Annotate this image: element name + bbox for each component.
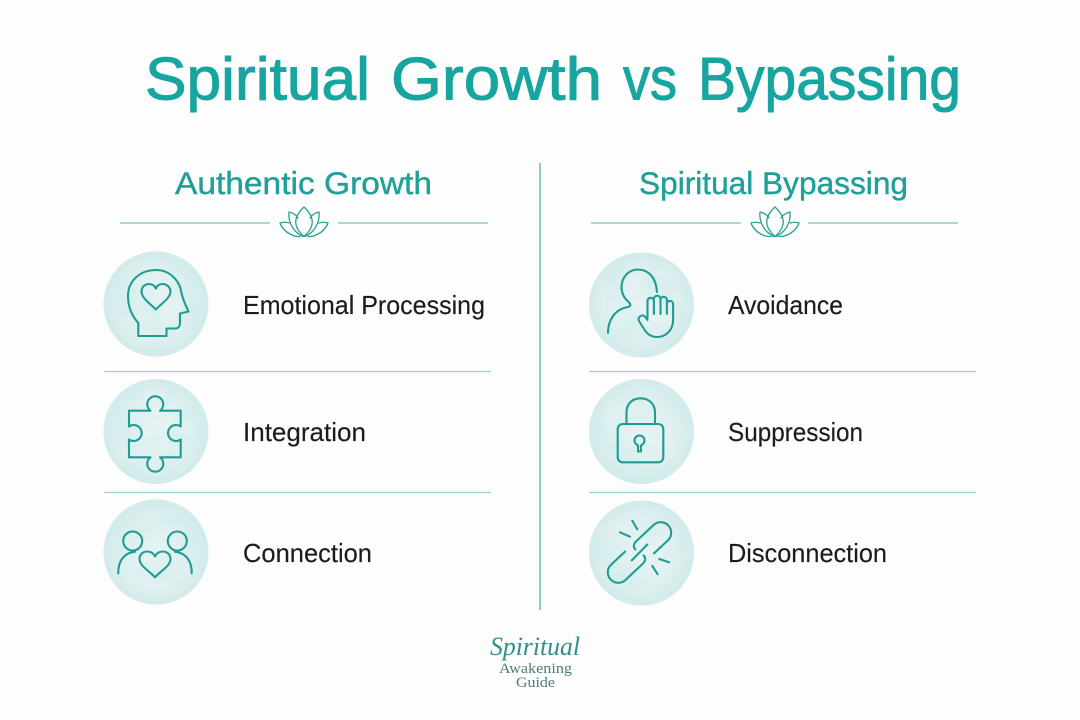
heading: authentic growth: Authentic Growth (175, 165, 432, 201)
heading divider with lotus (120, 207, 488, 237)
label: Connection (243, 538, 372, 568)
title: Bypassing (698, 46, 961, 112)
icon: person with raised hand (589, 252, 694, 358)
label: Integration (243, 417, 366, 447)
label: Emotional Processing (243, 290, 485, 320)
icon: puzzle piece (104, 379, 208, 484)
heading divider with lotus (591, 207, 958, 237)
row: integration (104, 379, 366, 484)
label: Avoidance (728, 290, 843, 320)
row: suppression (589, 379, 863, 484)
icon: two people and heart (104, 500, 208, 604)
footer logo: Guide (516, 675, 555, 691)
title: Spiritual (145, 46, 370, 112)
row: avoidance (589, 252, 843, 358)
heading: spiritual bypassing: Spiritual Bypassing (639, 165, 908, 201)
title (145, 46, 961, 112)
row: connection (104, 500, 372, 604)
panel: spiritual bypassing (589, 165, 976, 606)
footer logo (490, 632, 580, 691)
centre divider (539, 163, 541, 610)
title: Growth (391, 46, 602, 112)
icon: head with heart (104, 252, 208, 356)
row: emotional processing (104, 252, 485, 356)
footer logo: Spiritual (490, 632, 580, 661)
label: Disconnection (728, 538, 887, 568)
icon: padlock (589, 379, 694, 484)
panel: authentic growth (104, 165, 491, 604)
title: vs (623, 46, 677, 112)
label: Suppression (728, 417, 863, 447)
footer logo: Awakening (499, 661, 573, 677)
icon: broken chain link (589, 500, 694, 606)
row: disconnection (589, 500, 887, 606)
